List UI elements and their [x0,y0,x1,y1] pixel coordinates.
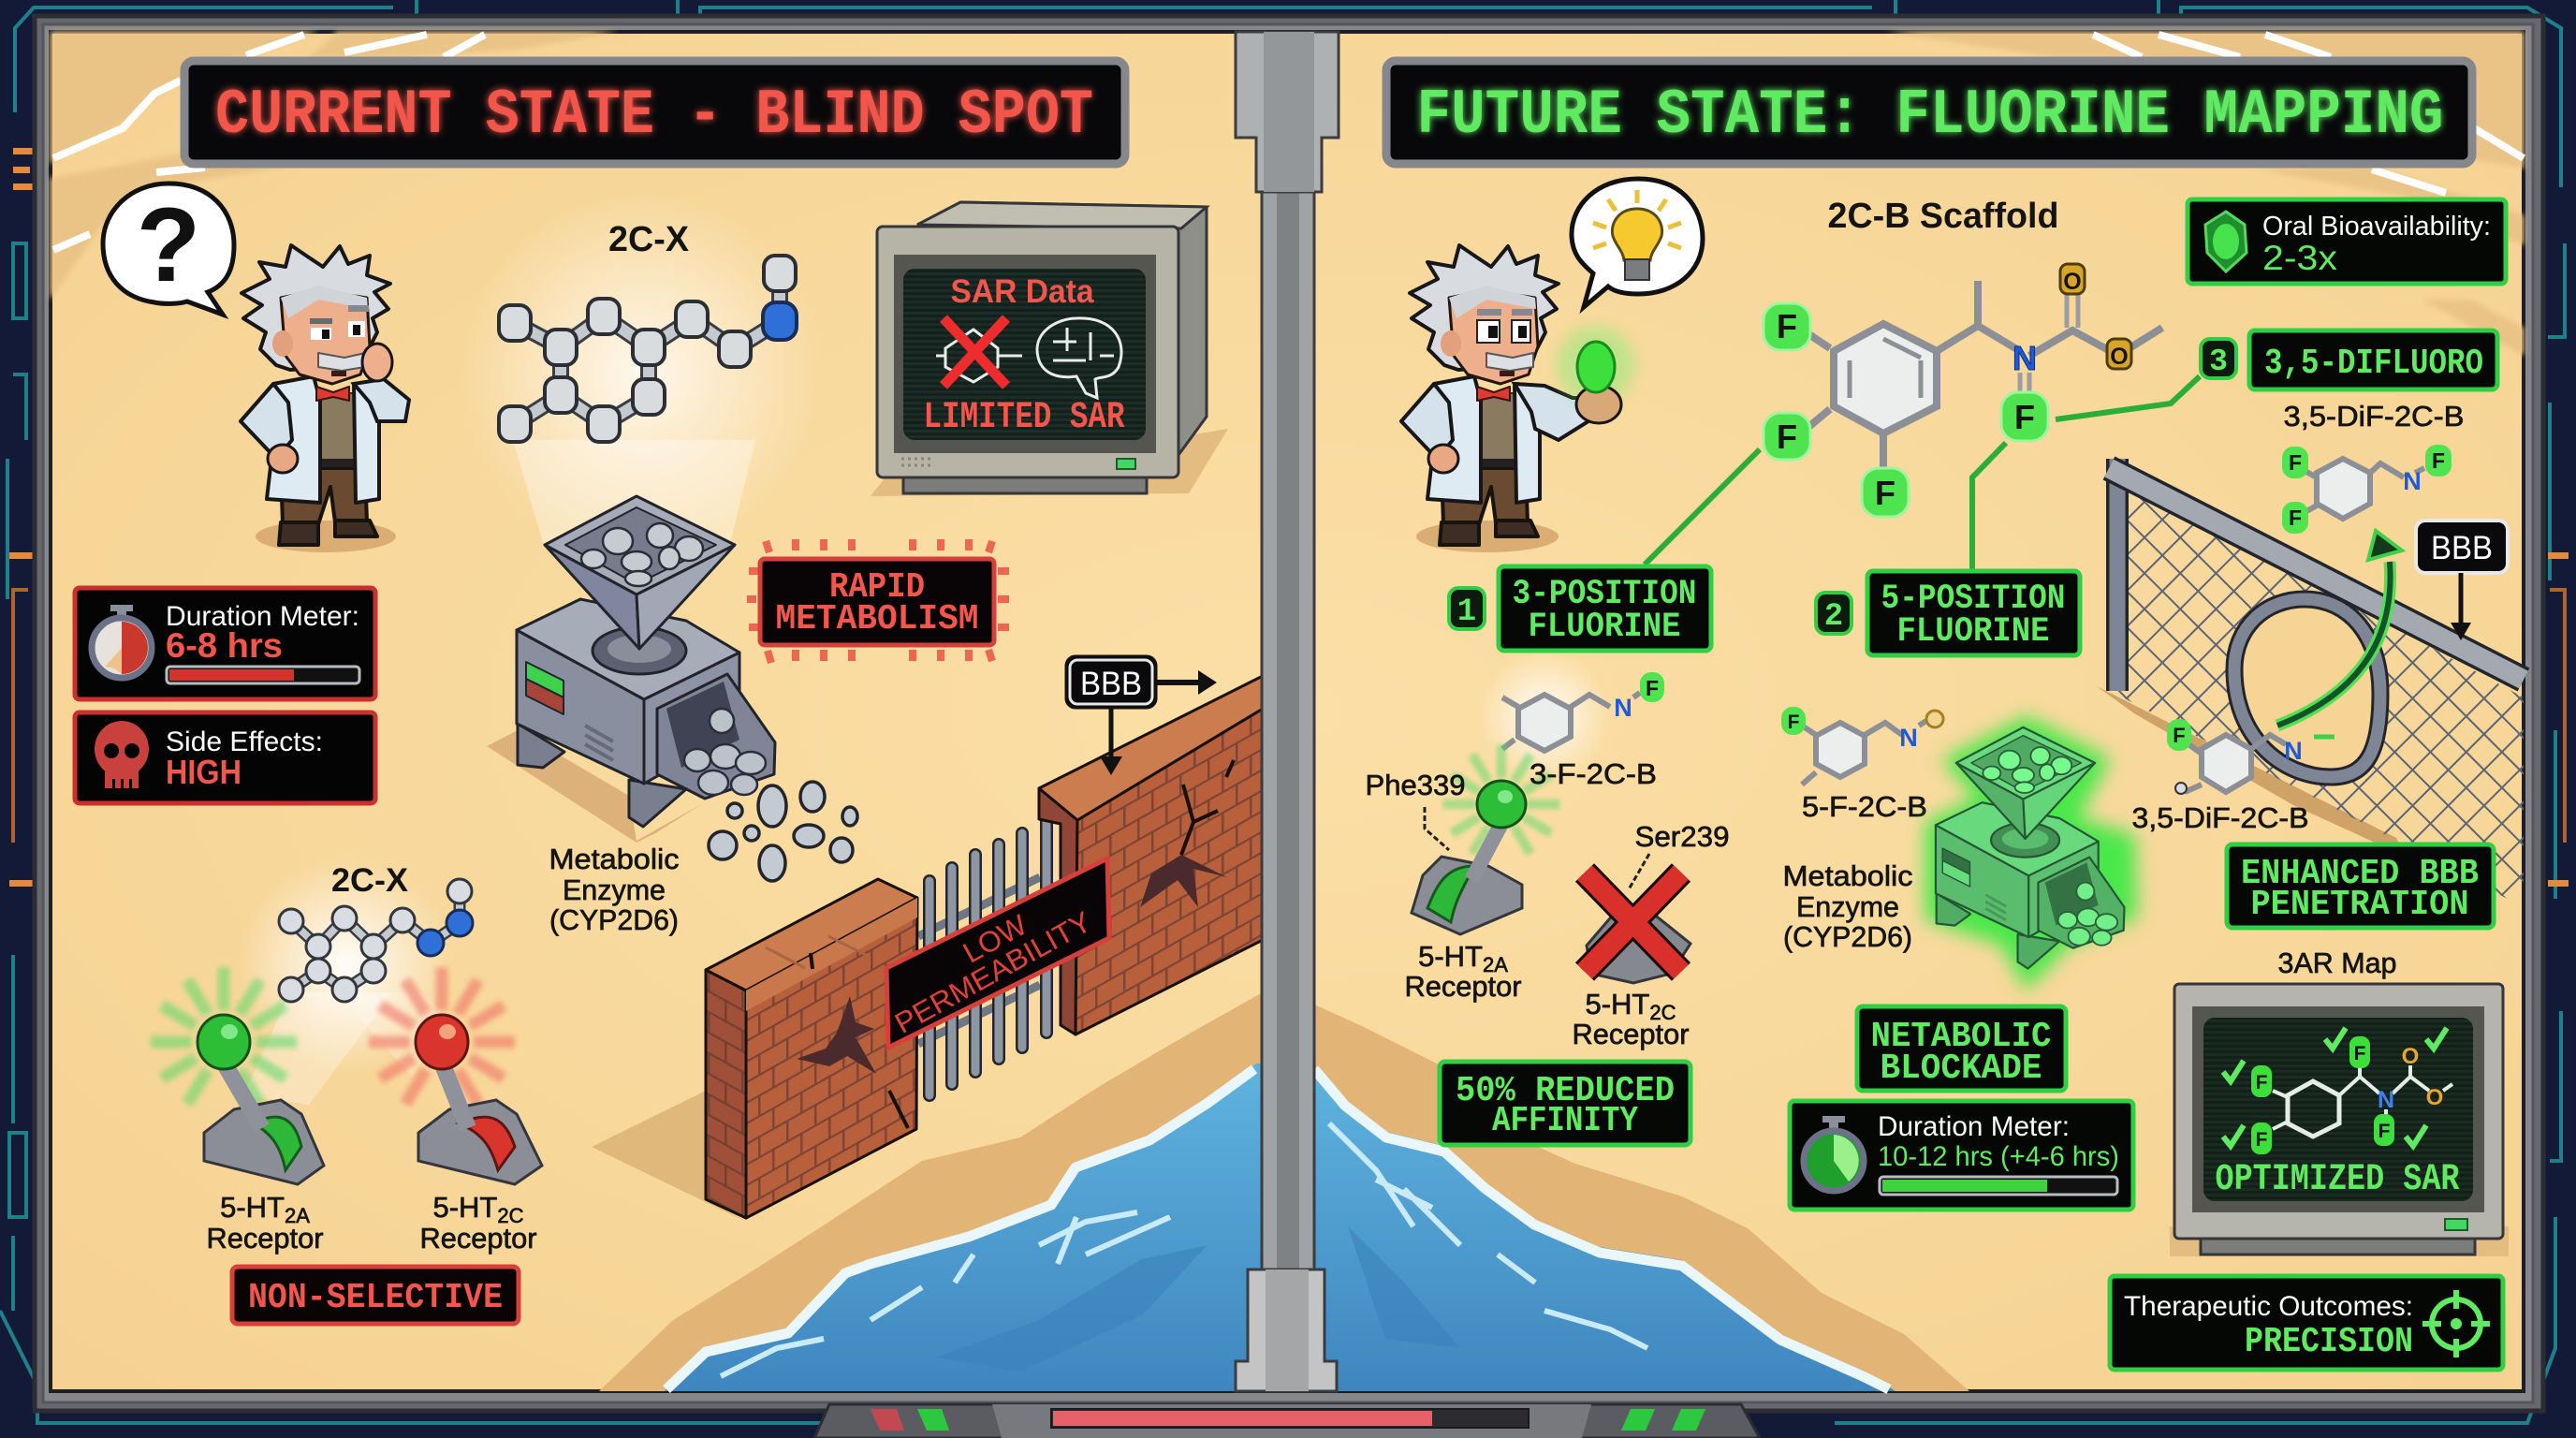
sign: low permeability [886,858,1109,1048]
CRT monitor: optimized SAR: F [2378,1121,2391,1142]
badge: position 2 [1816,593,1852,635]
callout: enhanced BBB penetration: ENHANCED BBB [2241,854,2479,894]
callout: 50% reduced affinity [1440,1062,1690,1145]
metric card: duration meter: Duration Meter: [166,601,359,632]
character: thinking scientist [241,245,409,552]
center pillar divider [1236,32,1339,1391]
CRT monitor: optimized SAR: N [2378,1087,2394,1113]
character: scientist with fluorine orb [1401,245,1635,552]
label: 5-HT2A receptor: 5-HT [1418,940,1483,973]
label: Ser239: Ser239 [1634,820,1730,853]
label: 2C-X receptor section: 2C-X [331,862,409,899]
label: 3,5-DiF-2C-B top: 3,5-DiF-2C-B [2284,400,2464,433]
label: 3-F-2C-B: 3-F-2C-B [1530,757,1657,790]
molecule: 3,5-DiF-2C-B top: F [2432,448,2445,473]
metric card: side effects [75,712,375,803]
label: 5-F-2C-B: 5-F-2C-B [1802,790,1927,823]
molecule: 2C-B scaffold: F [1777,418,1797,456]
callout: rapid metabolism: METABOLISM [775,599,979,639]
label: 5-HT2A receptor: Receptor [206,1222,324,1255]
label: 2C-B scaffold: 2C-B Scaffold [1827,197,2059,236]
left wall segment [706,879,917,1218]
label: metabolic enzyme: Enzyme [1796,890,1899,923]
metric card: side effects: Side Effects: [166,726,323,757]
icon: skull [95,721,149,788]
speech bubble: light bulb [1572,179,1703,307]
title: current state: CURRENT STATE - BLIND SPOT [215,80,1093,152]
molecule: 2C-B scaffold: F [1777,307,1797,345]
callout: 3-position fluorine: 3-POSITION [1513,575,1696,614]
metabolite rubble [709,782,857,881]
metric card: therapeutic outcomes: PRECISION [2245,1322,2413,1362]
callout: 50% reduced affinity: 50% REDUCED [1456,1071,1675,1111]
molecule: 3,5-DiF-2C-B top: F [2289,506,2302,530]
CRT monitor: optimized SAR [2170,984,2509,1256]
lever: 5-HT2A selective [1412,744,1559,934]
CRT monitor: optimized SAR: O [2402,1044,2419,1069]
panel: future state [1365,61,2524,1370]
molecule: 3-F-2C-B: N [1614,694,1632,722]
label: 5-HT2C receptor: Receptor [419,1222,537,1255]
molecule: 2C-B scaffold: O [2063,269,2082,295]
callout: enhanced BBB penetration [2227,844,2494,928]
label: 5-HT2A receptor: 5-HT [220,1191,285,1224]
metric card: duration meter: 6-8 hrs [166,626,283,665]
molecule: 3-F-2C-B: F [1646,676,1659,700]
label: 5-HT2A receptor [206,1191,324,1255]
metric card: duration meter extended: 10-12 hrs (+4-6 hrs) [1878,1141,2119,1172]
speech bubble: question mark [103,183,234,315]
label: metabolic enzyme: Metabolic [1782,859,1913,892]
molecule: 2C-B scaffold: F [1875,474,1895,512]
machine shadow [487,730,705,843]
chain-link fence: BBB [2097,459,2524,907]
lever: 5-HT2C blocked with red X [1585,873,1690,983]
molecule: 3,5-DiF-2C-B top: N [2403,467,2422,495]
callout: 3-position fluorine [1499,566,1711,651]
metric card: duration meter extended [1790,1101,2133,1210]
right wall segment [1039,676,1263,1034]
label: Phe339: Phe339 [1365,769,1466,801]
molecule: 5-F-2C-B: N [1899,724,1918,752]
CRT monitor: optimized SAR: F [2256,1129,2268,1151]
brick wall: blood brain barrier [592,676,1263,1222]
molecule glow [239,857,454,1105]
molecule: 2C-B scaffold: O [2110,344,2129,370]
metric card: oral bioavailability [2188,199,2506,284]
callout: metabolic blockade: BLOCKADE [1880,1049,2042,1089]
molecule: 5-F-2C-B [1781,707,1943,785]
callout: metabolic blockade: NETABOLIC [1870,1017,2052,1057]
molecule: 2C-X [499,256,797,442]
molecule: 3-F-2C-B [1479,651,1664,782]
label: Phe339 [1365,769,1466,850]
label: 5-HT2C receptor: Receptor [1573,1018,1689,1050]
label: metabolic enzyme: Metabolic [549,843,680,875]
callout: 5-position fluorine [1867,571,2080,655]
title: current state [184,61,1125,164]
badge: position 3 [2201,339,2236,379]
icon: green stopwatch [1804,1116,1864,1191]
tag: BBB with arrows [1066,656,1217,775]
metabolic enzyme machine [517,496,775,827]
bottom console [814,1404,1760,1438]
callout: 5-position fluorine: 5-POSITION [1881,580,2065,619]
label: metabolic enzyme: Enzyme [563,873,666,906]
metric card: duration meter [75,588,375,699]
CRT monitor: optimized SAR: O [2426,1085,2443,1110]
label: metabolic enzyme: (CYP2D6) [549,903,679,936]
speech bubble: question mark: ? [137,186,200,303]
label: 5-HT2A receptor: 2A [285,1204,310,1227]
callout: 50% reduced affinity: AFFINITY [1492,1101,1638,1141]
label: 5-HT2A receptor [1404,940,1522,1003]
molecule: 3,5-DiF-2C-B in barrier: N [2284,737,2303,765]
badge: position 2: 2 [1824,599,1843,635]
label: metabolic enzyme [1782,859,1913,953]
badge: position 1: 1 [1457,594,1476,630]
molecule: 3,5-DiF-2C-B in barrier [2167,719,2334,794]
callout: rapid metabolism: RAPID [829,567,925,608]
sign: low permeability: PERMEABILITY [889,905,1097,1040]
connector lines: fluorine positions [1645,376,2200,569]
CRT monitor: limited SAR: LIMITED SAR [923,397,1125,439]
label: SAR map: 3AR Map [2278,946,2396,979]
callout: non-selective: NON-SELECTIVE [248,1278,503,1318]
metric card: oral bioavailability: Oral Bioavailability: [2262,212,2491,242]
callout: 3,5-difluoro [2249,330,2497,389]
badge: position 3: 3 [2209,345,2228,379]
callout: 3-position fluorine: FLUORINE [1528,608,1681,647]
molecule: 2C-B scaffold [1764,264,2162,517]
title: future state: FUTURE STATE: FLUORINE MAPPING [1417,80,2443,152]
tag: BBB with arrow: BBB [2431,530,2493,566]
metric card: therapeutic outcomes: Therapeutic Outcomes: [2124,1291,2413,1322]
sign: low permeability: LOW [958,908,1033,970]
icon: green gem [2205,212,2247,271]
CRT monitor: limited SAR [871,202,1228,496]
callout: 5-position fluorine: FLUORINE [1896,612,2050,652]
label: 5-HT2C receptor: 5-HT [432,1191,497,1224]
label: metabolic enzyme [549,843,680,936]
CRT monitor: limited SAR: SAR Data [951,273,1094,310]
molecule: 5-F-2C-B: F [1788,712,1800,733]
label: 5-HT2C receptor [419,1191,537,1255]
callout: enhanced BBB penetration: PENETRATION [2250,885,2469,925]
callout: non-selective [232,1267,519,1324]
panel: current state [75,61,1263,1324]
metric card: duration meter extended: Duration Meter: [1878,1111,2070,1142]
callout: metabolic blockade [1857,1006,2066,1091]
light cone [459,192,824,557]
water [665,1064,1895,1391]
CRT monitor: optimized SAR: F [2354,1043,2366,1064]
CRT monitor: optimized SAR: OPTIMIZED SAR [2215,1159,2460,1201]
wet sand [599,992,1969,1391]
molecule: 2C-B scaffold: N [2012,339,2037,377]
CRT monitor: optimized SAR: F [2256,1072,2268,1093]
tag: BBB with arrows: BBB [1080,666,1142,702]
molecule: 3,5-DiF-2C-B top [2282,445,2452,534]
lever: 5-HT2C active red [369,967,542,1184]
arrow: penetrating the barrier [2277,531,2402,726]
label: 5-HT2C receptor: 2C [1649,1001,1676,1024]
label: 3,5-DiF-2C-B lower: 3,5-DiF-2C-B [2132,801,2308,834]
icon: target crosshair [2422,1290,2490,1357]
title: future state [1386,61,2472,164]
metric card: oral bioavailability: 2-3x [2262,239,2338,277]
metric card: therapeutic outcomes [2110,1276,2503,1370]
label: 5-HT2A receptor: 2A [1483,953,1508,976]
label: Ser239 [1629,820,1730,889]
label: 5-HT2C receptor: 2C [497,1204,524,1227]
callout: 3,5-difluoro: 3,5-DIFLUORO [2264,344,2483,384]
label: 5-HT2C receptor [1573,988,1689,1050]
molecule: 3,5-DiF-2C-B top: F [2289,450,2302,475]
label: metabolic enzyme: (CYP2D6) [1783,920,1912,953]
molecule: 3,5-DiF-2C-B in barrier: F [2173,724,2186,747]
metric card: side effects: HIGH [166,753,242,791]
metabolic enzyme machine blocked green [1936,727,2127,974]
lever: 5-HT2A active green [151,967,324,1184]
molecule: 2C-X small [279,879,473,1002]
tag: BBB with arrow [2416,521,2508,640]
molecule: 2C-B scaffold: F [2014,398,2035,436]
badge: position 1 [1449,588,1485,630]
callout: rapid metabolism [747,539,1009,663]
icon: stopwatch [92,605,152,678]
gate rods [918,820,1046,1095]
label: 2C-X: 2C-X [608,220,690,259]
label: 5-HT2C receptor: 5-HT [1585,988,1649,1020]
label: 5-HT2A receptor: Receptor [1404,970,1522,1003]
